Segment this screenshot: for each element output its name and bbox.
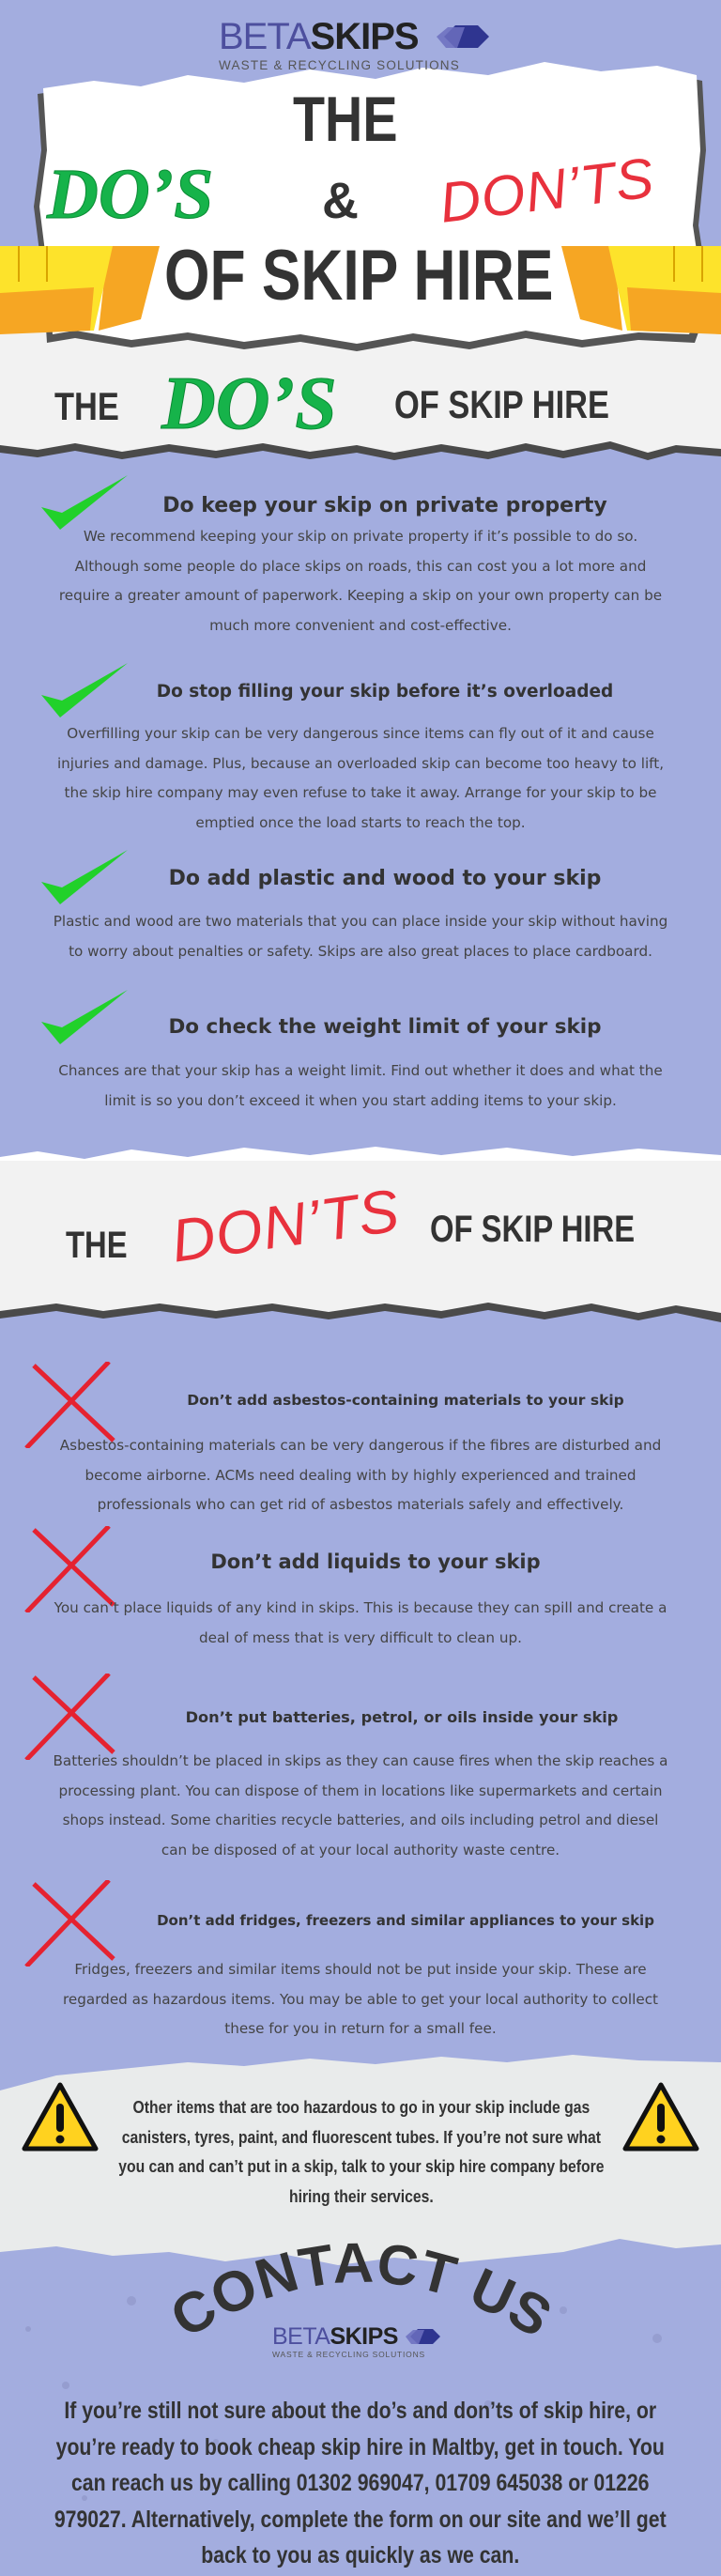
don't item 3: Batteries shouldn’t be placed in skips as they can cause fires when the skip reaches a processing plant. You can dispose of them in locations like supermarkets and certain shops instead. Some charities recycle batteries, and oils including petrol and diesel can be disposed of at your local authority waste centre.	[54, 1752, 667, 1858]
do item 2: Overfilling your skip can be very dangerous since items can fly out of it and cause injuries and damage. Plus, because an overloaded skip can become too heavy to lift, the skip hire company may even refuse to take it away. Arrange for your skip to be emptied once the load starts to reach the top.	[57, 725, 664, 830]
logo: betaskips top: WASTE & RECYCLING SOLUTIONS	[219, 58, 460, 72]
do item 4: Chances are that your skip has a weight limit. Find out whether it does and what the limit is so you don’t exceed it when you start adding items to your skip.	[58, 1062, 663, 1108]
don't item 1	[24, 1362, 661, 1513]
heading: the don'ts of skip hire	[66, 1176, 635, 1275]
icon: yellow skip left	[0, 246, 160, 334]
do item 3: Plastic and wood are two materials that you can place inside your skip without having to worry about penalties or safety. Skips are also great places to place cardboard.	[54, 913, 667, 960]
icon: red cross	[24, 1362, 115, 1448]
heading: the do's of skip hire: THE	[54, 384, 119, 428]
heading: the do's of skip hire: OF SKIP HIRE	[394, 382, 609, 426]
title: OF SKIP HIRE	[164, 236, 553, 316]
icon: warning left	[23, 2083, 98, 2151]
warning callout: Other items that are too hazardous to go in your skip include gas canisters, tyres, paint, and fluorescent tubes. If you’re not sure what you can and can’t put in a skip, talk to your skip hire company before hiring their services.	[118, 2097, 605, 2205]
title: THE	[293, 84, 398, 155]
do item 2: Do stop filling your skip before it’s overloaded	[157, 682, 613, 702]
icon: yellow skip right	[561, 246, 721, 334]
don't item 3: Don’t put batteries, petrol, or oils inside your skip	[186, 1708, 618, 1726]
don't item 1: Asbestos-containing materials can be very dangerous if the fibres are disturbed and become airborne. ACMs need dealing with by highly experienced and trained professionals who can get rid of asbestos materials safely and effectively.	[60, 1437, 661, 1513]
do item 4	[41, 990, 663, 1108]
don't item 4: Don’t add fridges, freezers and similar appliances to your skip	[157, 1912, 654, 1929]
don't item 2: You can’t place liquids of any kind in skips. This is because they can spill and create a deal of mess that is very difficult to clean up.	[54, 1599, 667, 1645]
splatter dots	[25, 2296, 662, 2558]
logo: betaskips bottom: BETASKIPS	[272, 2323, 398, 2350]
don't item 2: Don’t add liquids to your skip	[210, 1550, 541, 1573]
icon: warning right	[623, 2083, 698, 2151]
paper band: don'ts header	[0, 1147, 721, 1322]
icon: check	[41, 663, 128, 717]
heading: the don'ts of skip hire: OF SKIP HIRE	[430, 1209, 635, 1250]
logo: betaskips bottom: WASTE & RECYCLING SOLUTIONS	[272, 2350, 425, 2359]
don't item 4	[24, 1880, 658, 2037]
paper band: warning	[0, 2055, 721, 2265]
do item 2	[41, 663, 664, 830]
don't item 2	[24, 1526, 667, 1645]
icon: red cross	[24, 1526, 115, 1612]
do item 3	[41, 850, 667, 960]
logo: betaskips top	[219, 16, 489, 72]
do item 3: Do add plastic and wood to your skip	[169, 867, 601, 890]
title: DON’TS	[437, 146, 658, 235]
warning callout	[23, 2083, 698, 2206]
do item 4: Do check the weight limit of your skip	[168, 1015, 602, 1039]
don't item 1: Don’t add asbestos-containing materials to your skip	[187, 1392, 624, 1409]
don't item 3	[24, 1674, 667, 1858]
title	[45, 84, 658, 316]
title: &	[322, 173, 359, 229]
heading: the don'ts of skip hire: THE	[66, 1225, 128, 1266]
icon: check	[41, 850, 128, 904]
icon: check	[41, 990, 128, 1044]
paper: title	[34, 62, 710, 351]
title: DO’S	[47, 155, 213, 234]
heading: the don'ts of skip hire: DON’TS	[167, 1176, 404, 1275]
do item 1: We recommend keeping your skip on private property if it’s possible to do so. Although some people do place skips on roads, this can cost you a lot more and require a greater amount of paperwork. Keeping a skip on your own property can be much more convenient and cost-effective.	[59, 528, 662, 633]
icon: red cross	[24, 1880, 115, 1967]
heading: the do's of skip hire	[54, 362, 609, 445]
heading: the do's of skip hire: DO’S	[161, 362, 337, 445]
do item 1: Do keep your skip on private property	[162, 494, 607, 517]
do item 1	[41, 475, 662, 633]
icon: check	[41, 475, 128, 530]
paper band: do's header	[0, 324, 721, 460]
logo: betaskips bottom	[272, 2323, 440, 2359]
icon: red cross	[24, 1674, 115, 1760]
logo: betaskips top: BETASKIPS	[219, 16, 419, 57]
contact paragraph: If you’re still not sure about the do’s and don’ts of skip hire, or you’re ready to book cheap skip hire in Maltby, get in touch. You can reach us by calling 01302 969047, 01709 645038 or 01226 979027. Alternatively, complete the form on our site and we’ll get back to you as quickly as we can.	[54, 2398, 667, 2568]
don't item 4: Fridges, freezers and similar items should not be put inside your skip. These are regarded as hazardous items. You may be able to get your local authority to collect these for you in return for a small fee.	[63, 1961, 658, 2037]
